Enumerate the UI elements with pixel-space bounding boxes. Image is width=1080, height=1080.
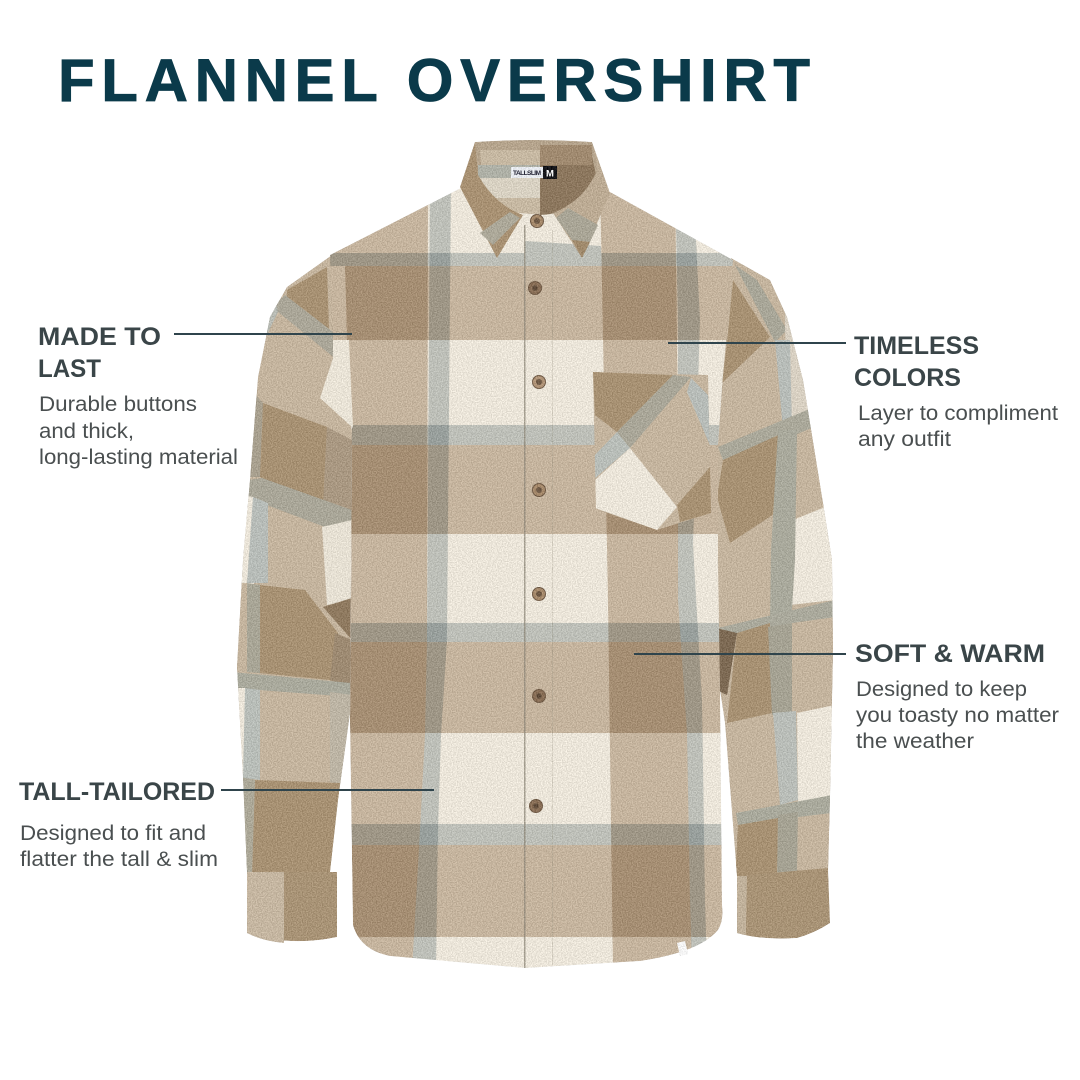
callout: timeless colors: TIMELESS (854, 332, 979, 360)
callout: made to last: and thick, (39, 420, 134, 443)
callout: made to last (38, 323, 352, 469)
placket stitch (552, 230, 553, 965)
callout: timeless colors: COLORS (854, 364, 961, 392)
callout: soft and warm: you toasty no matter (856, 704, 1059, 727)
shirt illustration (230, 140, 840, 980)
callout: soft and warm: SOFT & WARM (855, 640, 1045, 668)
placket seam (524, 225, 526, 970)
collar inner (462, 140, 606, 215)
callout: made to last: long-lasting material (39, 446, 238, 469)
left sleeve (237, 256, 352, 872)
plaid dark columns (320, 180, 692, 970)
pocket (590, 370, 715, 535)
callout: made to last: LAST (38, 355, 101, 383)
hem tag (677, 941, 688, 956)
callout: tall-tailored: Designed to fit and (20, 822, 206, 845)
right sleeve (715, 250, 840, 880)
collar label: TALLSLIM (513, 170, 541, 177)
callout: timeless colors: Layer to compliment (858, 402, 1058, 425)
callout: made to last: MADE TO (38, 323, 161, 351)
left cuff (247, 872, 337, 943)
callout: made to last: Durable buttons (39, 393, 197, 416)
plaid grey stripes (320, 180, 740, 970)
right cuff (737, 868, 830, 938)
callout: soft and warm (634, 640, 1059, 753)
callout: tall-tailored: TALL-TAILORED (19, 778, 215, 806)
shirt body with plaid (320, 180, 740, 980)
collar label (511, 166, 557, 180)
callout: soft and warm: the weather (856, 730, 974, 753)
callout: tall-tailored: flatter the tall & slim (20, 848, 218, 871)
buttons (528, 214, 546, 812)
callout: soft and warm: Designed to keep (856, 678, 1027, 701)
cream armhole wedge (320, 340, 353, 428)
collar label: M (546, 168, 554, 180)
collar right wing (553, 142, 610, 258)
callout: tall-tailored (19, 778, 434, 871)
collar left wing (460, 142, 523, 258)
title: FLANNEL OVERSHIRT (58, 47, 810, 114)
callout: timeless colors (668, 332, 1058, 451)
callout: timeless colors: any outfit (858, 428, 951, 451)
plaid dark rows (320, 266, 740, 937)
